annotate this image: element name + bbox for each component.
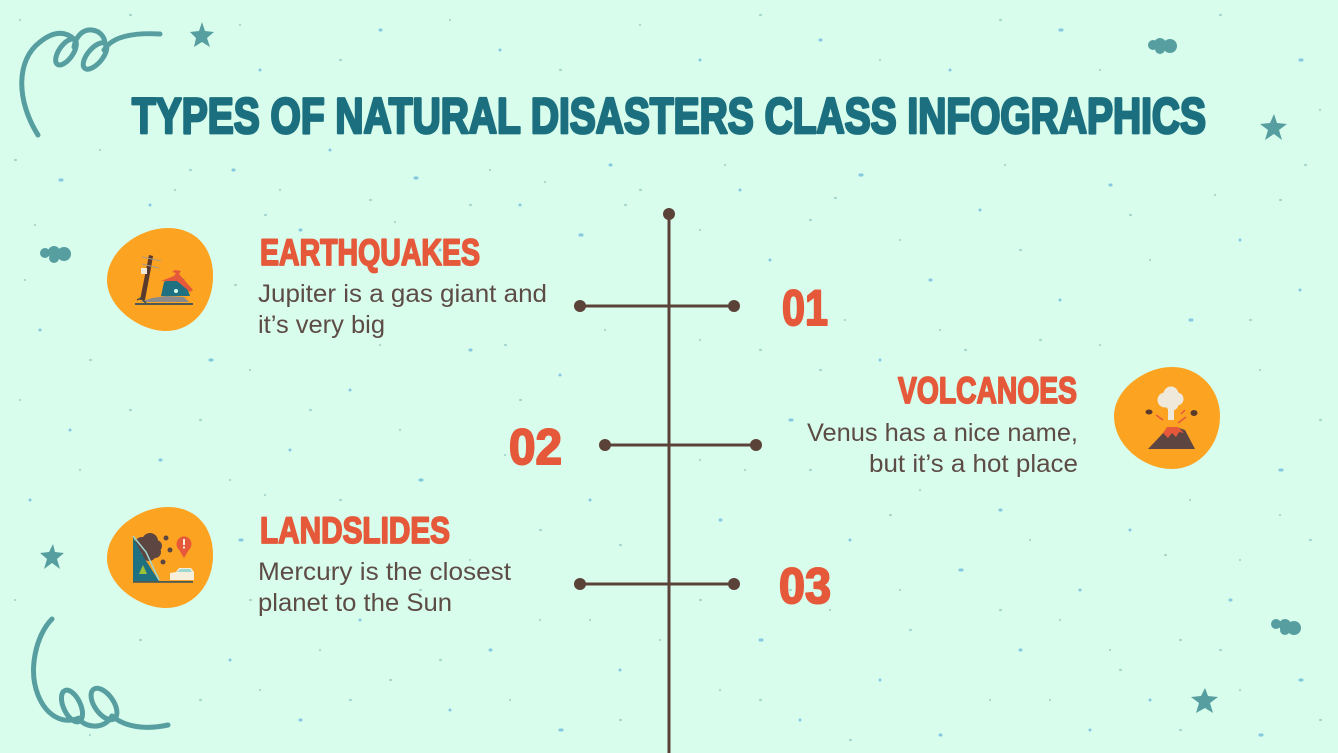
number 01: 01 <box>782 280 828 336</box>
earthquakes heading: EARTHQUAKES <box>260 232 480 273</box>
decorative curl: bottom left <box>34 619 168 727</box>
landslides heading: LANDSLIDES <box>260 510 450 551</box>
icon: landslide <box>107 507 213 608</box>
volcanoes heading: VOLCANOES <box>898 370 1077 411</box>
icon: volcano <box>1114 367 1220 469</box>
landslides text: planet to the Sun <box>258 589 452 617</box>
icon: earthquake <box>107 228 213 331</box>
panel: landslides <box>107 507 511 617</box>
number 03: 03 <box>779 558 831 614</box>
panel: volcanoes <box>807 367 1220 478</box>
cloud: bottom right <box>1271 619 1301 635</box>
earthquakes text: it’s very big <box>258 311 385 339</box>
star: left <box>40 544 64 569</box>
decorative curl: top left <box>22 30 160 135</box>
panel: earthquakes <box>107 228 547 339</box>
star: top right <box>1260 114 1287 140</box>
star: top left <box>190 22 214 47</box>
number 02: 02 <box>509 419 562 475</box>
star: bottom right <box>1191 688 1218 713</box>
volcanoes text: but it’s a hot place <box>869 450 1078 478</box>
volcanoes text: Venus has a nice name, <box>807 419 1078 447</box>
timeline <box>574 208 762 753</box>
cloud: left <box>40 246 71 263</box>
landslides text: Mercury is the closest <box>258 558 511 586</box>
earthquakes text: Jupiter is a gas giant and <box>258 280 547 308</box>
cloud: top right <box>1148 38 1177 54</box>
